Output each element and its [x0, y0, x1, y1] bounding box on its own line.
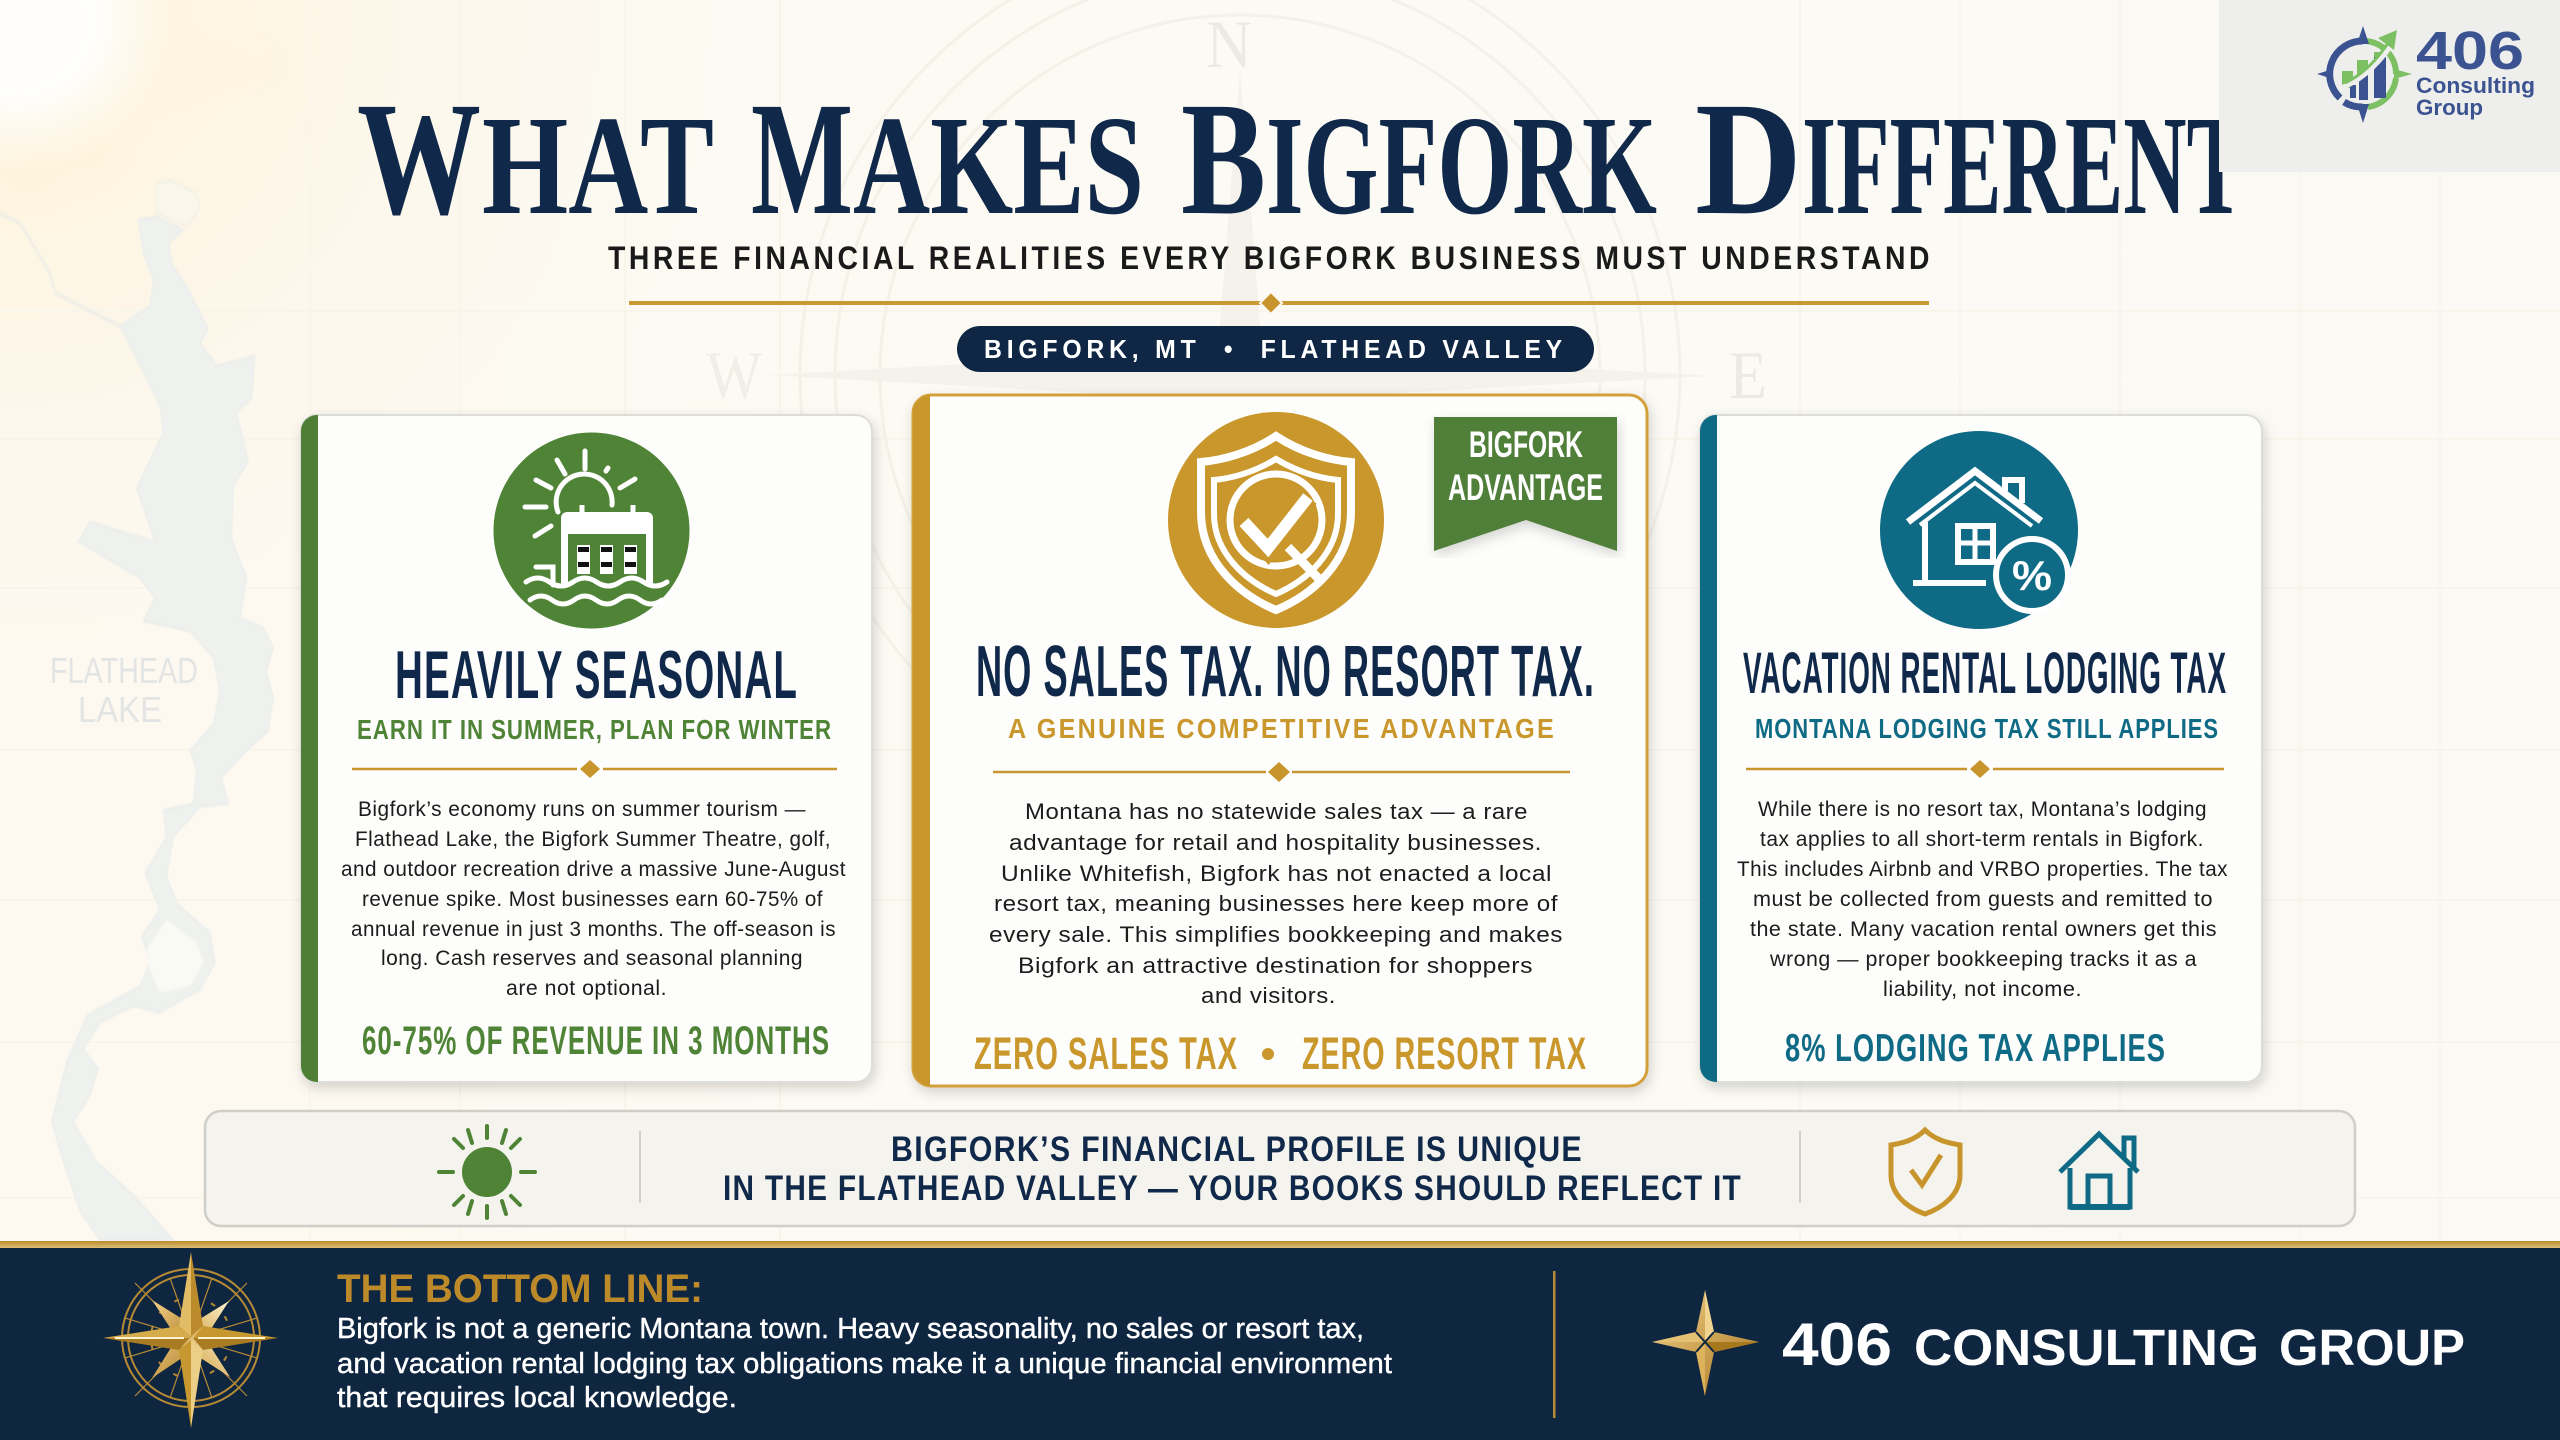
icon: house with percent: %	[2012, 552, 2052, 599]
icon: house with percent	[1880, 431, 2078, 629]
divider	[1746, 760, 2224, 778]
body text: revenue spike. Most businesses earn 60-75% of	[362, 887, 823, 911]
title: HAT	[482, 86, 714, 244]
footer band	[0, 1241, 2560, 1440]
divider	[352, 760, 837, 778]
heading: HEAVILY SEASONAL	[395, 637, 798, 713]
body text: While there is no resort tax, Montana’s lodging	[1758, 797, 2207, 821]
compass watermark: W	[706, 337, 763, 413]
callout text: BIGFORK’S FINANCIAL PROFILE IS UNIQUE	[891, 1130, 1583, 1169]
divider	[993, 762, 1570, 782]
body text: Bigfork an attractive destination for shoppers	[1018, 953, 1533, 978]
logo box: 406 Consulting Group	[2219, 0, 2560, 172]
icon: shield with check	[1168, 412, 1384, 628]
Flathead Lake map watermark: LAKE	[78, 689, 162, 730]
body text	[1737, 797, 2228, 1001]
subheading: EARN IT IN SUMMER, PLAN FOR WINTER	[357, 714, 832, 745]
panel: vacation rental lodging tax	[1700, 415, 2262, 1082]
icon: compass rose	[103, 1252, 278, 1428]
Flathead Lake map watermark	[0, 180, 273, 1240]
body text: and visitors.	[1201, 983, 1336, 1008]
body text	[989, 799, 1563, 1008]
icon: seasonal calendar and sun	[494, 432, 690, 628]
icon: small shield	[1891, 1130, 1960, 1214]
body text: long. Cash reserves and seasonal planning	[381, 946, 803, 970]
title: D	[1695, 70, 1802, 249]
logo mark	[2317, 26, 2412, 123]
stat: ZERO SALES TAX	[974, 1028, 1238, 1079]
logo box: 406 Consulting Group: Group	[2416, 95, 2483, 120]
subtitle: THREE FINANCIAL REALITIES EVERY BIGFORK BUSINESS MUST UNDERSTAND	[608, 240, 1933, 276]
brand name: CONSULTING	[1914, 1319, 2259, 1376]
icon: sun	[439, 1126, 535, 1218]
location pill	[957, 326, 1594, 372]
panel: no sales tax	[913, 395, 1647, 1086]
subheading: A GENUINE COMPETITIVE ADVANTAGE	[1008, 713, 1556, 744]
body text: the state. Many vacation rental owners get this	[1750, 917, 2217, 941]
title: AKES	[853, 86, 1144, 244]
bottom line text	[337, 1313, 1392, 1414]
callout band	[205, 1111, 2355, 1226]
brand name	[1782, 1311, 2465, 1378]
body text: Flathead Lake, the Bigfork Summer Theatre, golf,	[355, 827, 831, 851]
compass watermark	[706, 0, 1767, 815]
title: IGFORK	[1266, 86, 1657, 244]
body text: must be collected from guests and remitted to	[1753, 887, 2213, 911]
callout text	[723, 1130, 1742, 1208]
ribbon: Bigfork advantage: ADVANTAGE	[1448, 467, 1603, 508]
panel: heavily seasonal	[301, 415, 872, 1082]
ribbon: Bigfork advantage: BIGFORK	[1469, 424, 1583, 465]
icon: gold star	[1652, 1290, 1759, 1396]
stat: 8% LODGING TAX APPLIES	[1785, 1027, 2166, 1070]
body text: Bigfork’s economy runs on summer tourism —	[358, 797, 806, 821]
callout text: IN THE FLATHEAD VALLEY — YOUR BOOKS SHOULD REFLECT IT	[723, 1169, 1742, 1208]
bottom line text: Bigfork is not a generic Montana town. Heavy seasonality, no sales or resort tax,	[337, 1313, 1364, 1345]
Flathead Lake map watermark: FLATHEAD	[50, 650, 198, 691]
brand name: GROUP	[2279, 1319, 2465, 1376]
bottom line heading: THE BOTTOM LINE:	[337, 1267, 703, 1311]
body text: Montana has no statewide sales tax — a rare	[1025, 799, 1528, 824]
title: IFFERENT	[1802, 86, 2245, 244]
body text: resort tax, meaning businesses here keep more of	[994, 891, 1558, 916]
heading: NO SALES TAX. NO RESORT TAX.	[976, 632, 1595, 712]
logo box: 406 Consulting Group: Consulting	[2416, 73, 2535, 98]
location pill: BIGFORK, MT • FLATHEAD VALLEY	[984, 334, 1567, 364]
body text: wrong — proper bookkeeping tracks it as a	[1769, 947, 2197, 971]
body text: tax applies to all short-term rentals in Bigfork.	[1760, 827, 2204, 851]
title divider	[629, 292, 1929, 314]
title: W	[357, 70, 481, 249]
logo box: 406 Consulting Group: 406	[2416, 21, 2524, 81]
body text: This includes Airbnb and VRBO properties. The tax	[1737, 857, 2228, 881]
bottom line text: and vacation rental lodging tax obligations make it a unique financial environment	[337, 1348, 1392, 1380]
body text: and outdoor recreation drive a massive June-August	[341, 857, 846, 881]
ribbon: Bigfork advantage	[1434, 417, 1617, 551]
compass watermark: N	[1206, 6, 1252, 82]
stat	[974, 1028, 1587, 1079]
icon: small house	[2060, 1134, 2138, 1207]
title: M	[751, 70, 853, 249]
title: B	[1181, 70, 1266, 249]
compass watermark: E	[1729, 337, 1767, 413]
stat: ZERO RESORT TAX	[1302, 1028, 1587, 1079]
body text	[341, 797, 846, 1000]
bottom line text: that requires local knowledge.	[337, 1382, 737, 1414]
body text: annual revenue in just 3 months. The off-season is	[351, 917, 836, 941]
brand name: 406	[1782, 1311, 1892, 1378]
subheading: MONTANA LODGING TAX STILL APPLIES	[1755, 713, 2219, 744]
stat: 60-75% OF REVENUE IN 3 MONTHS	[362, 1019, 830, 1063]
body text: liability, not income.	[1883, 977, 2082, 1001]
body text: Unlike Whitefish, Bigfork has not enacted a local	[1001, 861, 1552, 886]
body text: advantage for retail and hospitality businesses.	[1009, 830, 1542, 855]
body text: are not optional.	[506, 976, 667, 1000]
body text: every sale. This simplifies bookkeeping and makes	[989, 922, 1563, 947]
